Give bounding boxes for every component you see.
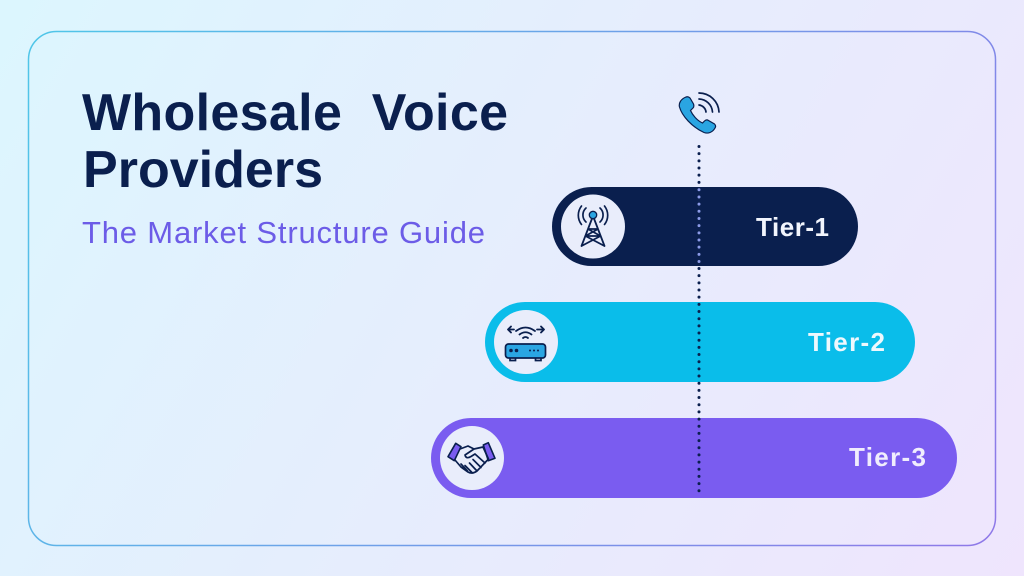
- title: [82, 84, 508, 199]
- title: Wholesale Voice: [82, 84, 508, 142]
- subtitle: The Market Structure Guide: [82, 215, 485, 250]
- pill: Tier-2: [485, 302, 915, 382]
- pill: Tier-1: [552, 187, 858, 266]
- icon: handshake: [440, 426, 504, 490]
- label: Tier-2: Tier-2: [808, 327, 885, 357]
- icon: router with wifi: [494, 310, 558, 374]
- label: Tier-1: Tier-1: [756, 212, 829, 242]
- dotted vertical axis: [698, 146, 700, 495]
- pill: Tier-3: [431, 418, 957, 498]
- label: Tier-3: Tier-3: [849, 442, 926, 472]
- title: Providers: [83, 141, 323, 199]
- icon: telephone with signal waves: [679, 93, 719, 133]
- icon: cell tower: [561, 194, 625, 258]
